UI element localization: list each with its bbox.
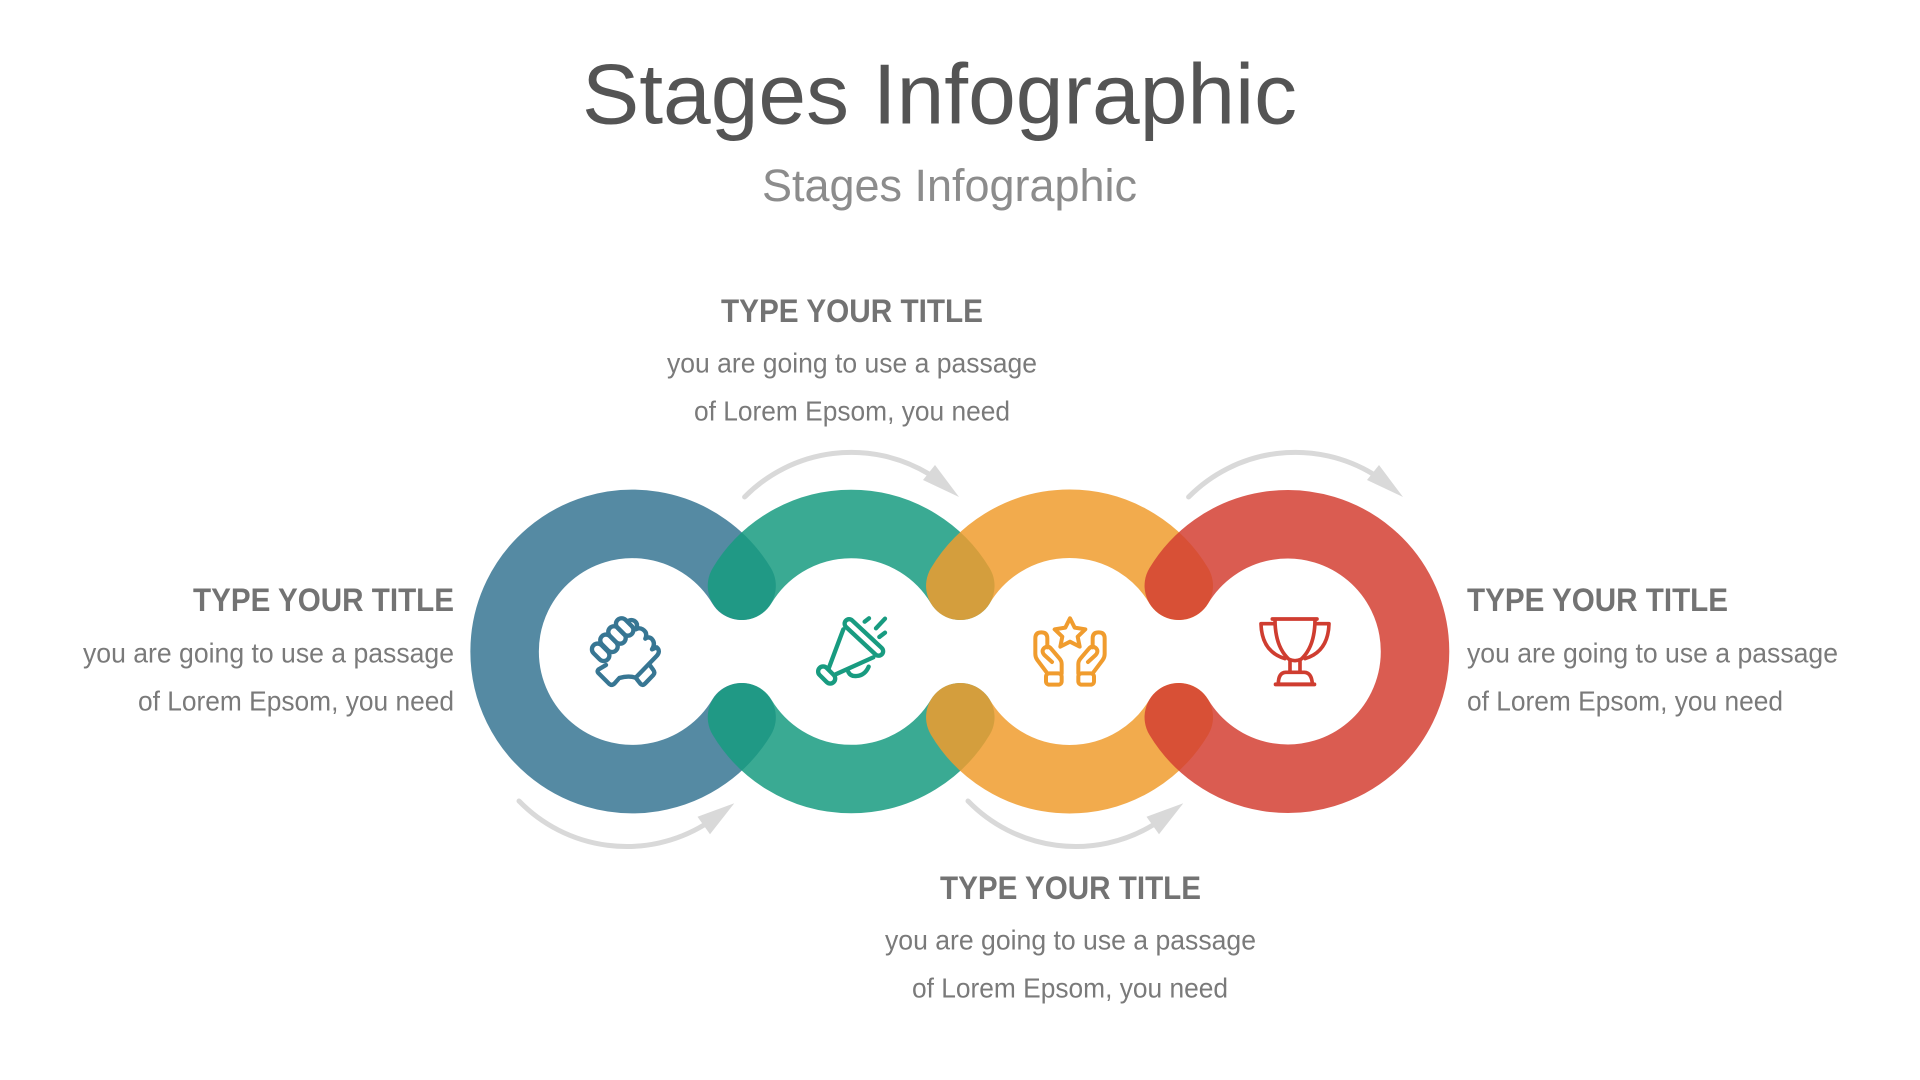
body line 2: of Lorem Epsom, you need: [138, 686, 454, 716]
ring: stage 2 teal: [742, 524, 960, 779]
title: Stages Infographic: [582, 48, 1297, 142]
ring: stage 4 red: [1179, 524, 1415, 779]
ring: stage 1 blue: [505, 524, 742, 779]
heading: TYPE YOUR TITLE: [193, 582, 454, 618]
ring: stage 3 orange: [960, 524, 1179, 779]
body line 1: you are going to use a passage: [667, 348, 1037, 378]
body line 1: you are going to use a passage: [885, 924, 1256, 956]
icon: trophy: [1261, 619, 1329, 684]
arrow: top between stage 3 and 4: [1189, 452, 1403, 497]
heading: TYPE YOUR TITLE: [1467, 582, 1728, 618]
text block: stage 4 right: [1467, 582, 1838, 716]
arrow: top between stage 1 and 2: [745, 452, 959, 497]
body line 2: of Lorem Epsom, you need: [694, 396, 1010, 426]
text block: stage 1 left: [83, 582, 454, 716]
subtitle: Stages Infographic: [762, 160, 1137, 211]
icon: megaphone: [816, 617, 885, 686]
text block: stage 2 top: [667, 293, 1037, 426]
text block: stage 3 bottom: [885, 870, 1256, 1004]
icon: hands holding star: [1035, 618, 1105, 685]
body line 1: you are going to use a passage: [83, 638, 454, 668]
body line 1: you are going to use a passage: [1467, 638, 1838, 668]
arrow: bottom between stage 3 and 4: [968, 801, 1183, 847]
icon: handshake: [590, 616, 659, 685]
body line 2: of Lorem Epsom, you need: [912, 972, 1228, 1004]
heading: TYPE YOUR TITLE: [940, 870, 1201, 906]
arrow: bottom between stage 1 and 2: [519, 801, 734, 847]
linked rings chart: [505, 524, 1415, 779]
heading: TYPE YOUR TITLE: [721, 293, 983, 329]
body line 2: of Lorem Epsom, you need: [1467, 686, 1783, 716]
